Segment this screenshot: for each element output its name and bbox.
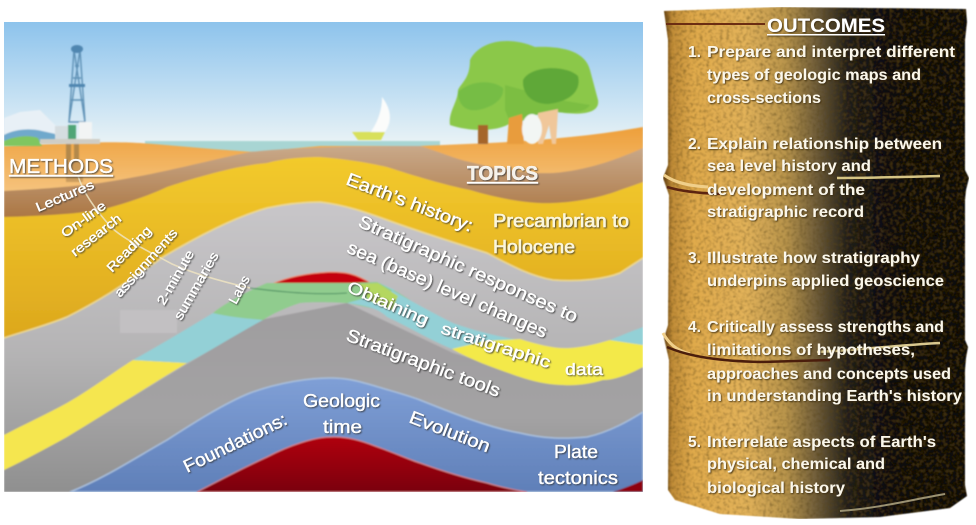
topic: Precambrian to Holocene: Precambrian to xyxy=(493,211,629,231)
topic: Earth's history: Earth’s history: xyxy=(344,169,476,236)
outcome 1: cross-sections xyxy=(707,90,821,107)
topic: Obtaining stratigraphic data: stratigraphic xyxy=(439,320,553,372)
layer: upper grey xyxy=(4,202,643,450)
topic: Geologic time xyxy=(303,391,380,437)
layer: data band green xyxy=(213,282,410,320)
icon: sailboat xyxy=(352,97,390,140)
icon: trees xyxy=(450,41,598,144)
outcome 5: Interrelate aspects of Earth's xyxy=(707,434,936,451)
line: green seam xyxy=(250,288,347,294)
topic: Obtaining stratigraphic data: data xyxy=(565,361,604,379)
icon: oil derrick xyxy=(40,45,100,182)
layer: deep red core xyxy=(197,437,527,492)
line: drill path xyxy=(78,176,250,288)
sky xyxy=(4,22,643,157)
topic: Precambrian to Holocene xyxy=(493,211,629,257)
topic: Stratigraphic responses: sea (base) level changes xyxy=(344,237,550,342)
method: Reading assignments: assignments xyxy=(111,225,181,300)
barrel body xyxy=(663,7,969,519)
outcome 5: 5. xyxy=(688,434,701,451)
topic: Plate tectonics xyxy=(538,442,618,488)
heading: METHODS: METHODS xyxy=(9,156,113,178)
method: 2-minute summaries xyxy=(154,247,222,322)
panel: methods and topics labels xyxy=(9,156,629,488)
heading: TOPICS: TOPICS xyxy=(467,163,538,185)
heading: OUTCOMES: OUTCOMES xyxy=(767,15,885,37)
method: On-line research: research xyxy=(68,211,124,259)
panel: oil barrel xyxy=(663,7,969,519)
dome: red reservoir top xyxy=(272,272,372,284)
barrel rib: upper xyxy=(664,175,940,194)
topic: Evolution: Evolution xyxy=(407,407,493,456)
method: Labs: Labs xyxy=(225,272,253,306)
method: On-line research: On-line xyxy=(58,198,109,240)
outcome 2: development of the xyxy=(707,182,865,199)
outcome 2: sea level history and xyxy=(707,158,871,175)
outcome 2: Explain relationship between xyxy=(707,136,942,153)
outcome 4: 4. xyxy=(688,319,701,336)
barrel rib: top xyxy=(666,23,765,25)
layer: teal wedge right xyxy=(610,327,643,345)
outcome 3: underpins applied geoscience xyxy=(707,273,944,290)
panel: geologic cross-section xyxy=(4,22,643,492)
method: 2-minute summaries: summaries xyxy=(171,249,222,322)
outcome 4: limitations of hypotheses, xyxy=(707,342,915,359)
outcome 3: Illustrate how stratigraphy xyxy=(707,250,920,267)
topic: Obtaining stratigraphic data xyxy=(344,278,604,379)
outcome 4: approaches and concepts used xyxy=(707,366,951,383)
outcome 4: in understanding Earth's history xyxy=(707,388,962,405)
topic: Geologic time: Geologic xyxy=(303,391,380,411)
outcome 3: 3. xyxy=(688,250,701,267)
topic: Plate tectonics: Plate xyxy=(554,442,598,462)
layer: orange surface sand xyxy=(4,127,643,200)
layer: gold Earth's history band xyxy=(4,157,643,350)
topic: Obtaining stratigraphic data: Obtaining xyxy=(344,278,431,329)
layer: blue Foundations band xyxy=(70,378,643,492)
topic: Plate tectonics: tectonics xyxy=(538,468,618,488)
topic: Foundations: Foundations: xyxy=(180,409,290,477)
outcome 1: types of geologic maps and xyxy=(707,67,921,84)
outcome 4 xyxy=(688,319,962,405)
layer: data band teal xyxy=(133,313,263,363)
topic: Geologic time: time xyxy=(323,417,362,437)
layer: data band teal right xyxy=(347,282,520,349)
barrel rib: lower xyxy=(663,333,940,362)
outcome 5: physical, chemical and xyxy=(707,456,885,473)
outcome 3 xyxy=(688,250,944,290)
panel: outcomes text xyxy=(688,15,962,497)
layer: lower grey xyxy=(4,303,643,492)
outcome 4: Critically assess strengths and xyxy=(707,319,944,336)
topic: Stratigraphic tools: Stratigraphic tools xyxy=(344,325,503,401)
method: On-line research xyxy=(58,198,124,259)
topic: Precambrian to Holocene: Holocene xyxy=(493,237,575,257)
outcome 2: stratigraphic record xyxy=(707,204,864,221)
outcome 2: 2. xyxy=(688,136,701,153)
method: 2-minute summaries: 2-minute xyxy=(154,247,197,308)
outcome 5: biological history xyxy=(707,480,845,497)
barrel rib: bottom xyxy=(840,494,945,511)
layer: data band yellow left xyxy=(4,360,187,470)
layer: data band yellow right xyxy=(452,339,643,385)
method: Lectures: Lectures xyxy=(33,176,97,215)
topic: Stratigraphic responses: Stratigraphic responses to xyxy=(355,211,581,326)
sea xyxy=(144,140,441,152)
outcome 1: 1. xyxy=(688,44,701,61)
layer: brown stratum xyxy=(4,146,643,222)
method: Reading assignments: Reading xyxy=(103,223,154,275)
method: Reading assignments xyxy=(103,223,181,300)
patch: light rectangle in grey xyxy=(120,317,176,332)
outcome 1 xyxy=(688,44,955,107)
outcome 2 xyxy=(688,136,942,221)
topic: Stratigraphic responses xyxy=(344,211,581,342)
outcome 1: Prepare and interpret different xyxy=(707,44,955,61)
layer: red corner right xyxy=(613,480,643,492)
icon: mountains and hills xyxy=(4,110,62,146)
highlight: yellow-green patch xyxy=(360,283,398,310)
outcome 5 xyxy=(688,434,936,497)
